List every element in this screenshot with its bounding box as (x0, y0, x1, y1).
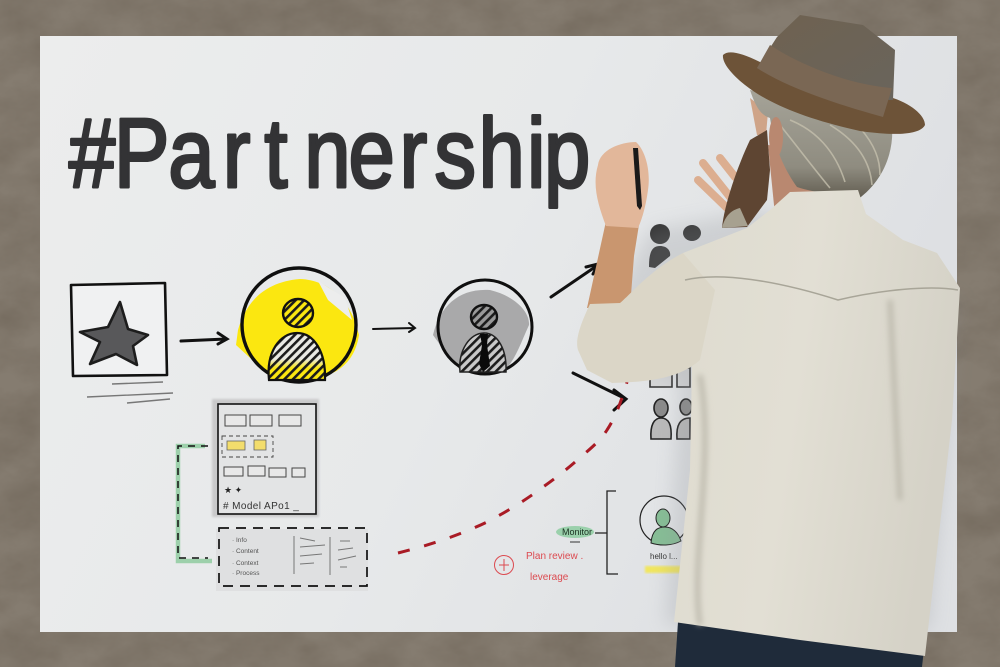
red plus note: leverage (530, 572, 569, 583)
red dashed curve (398, 382, 627, 553)
man (577, 15, 960, 667)
panel: dashed info list (216, 528, 368, 591)
beard (722, 130, 770, 228)
icon: grey person with tie (433, 280, 532, 374)
red plus note (494, 551, 583, 583)
partial people grid (649, 224, 701, 439)
arrow: yellow person to grey person (373, 323, 415, 332)
forearm (587, 212, 641, 308)
arrow: star to yellow person (181, 333, 227, 344)
wireframe star marks: ★ ✦ (224, 485, 243, 495)
icon: yellow person (236, 268, 359, 382)
arrow: down to the right (573, 373, 626, 410)
wireframe caption: # Model APo1 _ (223, 501, 299, 512)
connector: green bracket (178, 446, 212, 561)
panel: dashed info list: · Context (232, 560, 259, 567)
icon: green person in bracket (595, 491, 688, 574)
panel: wireframe card (212, 399, 319, 517)
arrow: up to the right (551, 264, 598, 297)
pencil (633, 148, 642, 210)
icon: green person in bracket: hello l... (650, 552, 678, 561)
panel: dashed info list: · Info (232, 537, 247, 544)
icon: star in square (71, 283, 173, 403)
face sliver (750, 98, 768, 135)
shirt body (674, 190, 960, 656)
hair strands (780, 120, 880, 188)
ear (769, 117, 783, 157)
star underline scribbles (87, 382, 173, 403)
hair (750, 90, 892, 200)
hat crown (757, 15, 895, 100)
green person note (645, 566, 685, 573)
hat brim (723, 52, 925, 134)
shirt fold shadow (698, 300, 900, 625)
jeans (675, 622, 925, 667)
neck (768, 145, 845, 215)
green highlighted note: Monitor (562, 527, 592, 537)
green highlighted note (556, 526, 594, 542)
tie (479, 334, 490, 372)
shadow on board (590, 210, 960, 630)
red plus note: Plan review . (526, 551, 583, 562)
sleeve (577, 253, 715, 383)
panel: dashed info list: · Content (232, 548, 259, 555)
left hand fingers (698, 158, 735, 208)
hand (596, 142, 649, 228)
panel: dashed info list: · Process (232, 570, 260, 577)
hat band (757, 45, 892, 117)
shirt yoke seam (685, 277, 958, 300)
title: #Partnership (69, 100, 590, 209)
